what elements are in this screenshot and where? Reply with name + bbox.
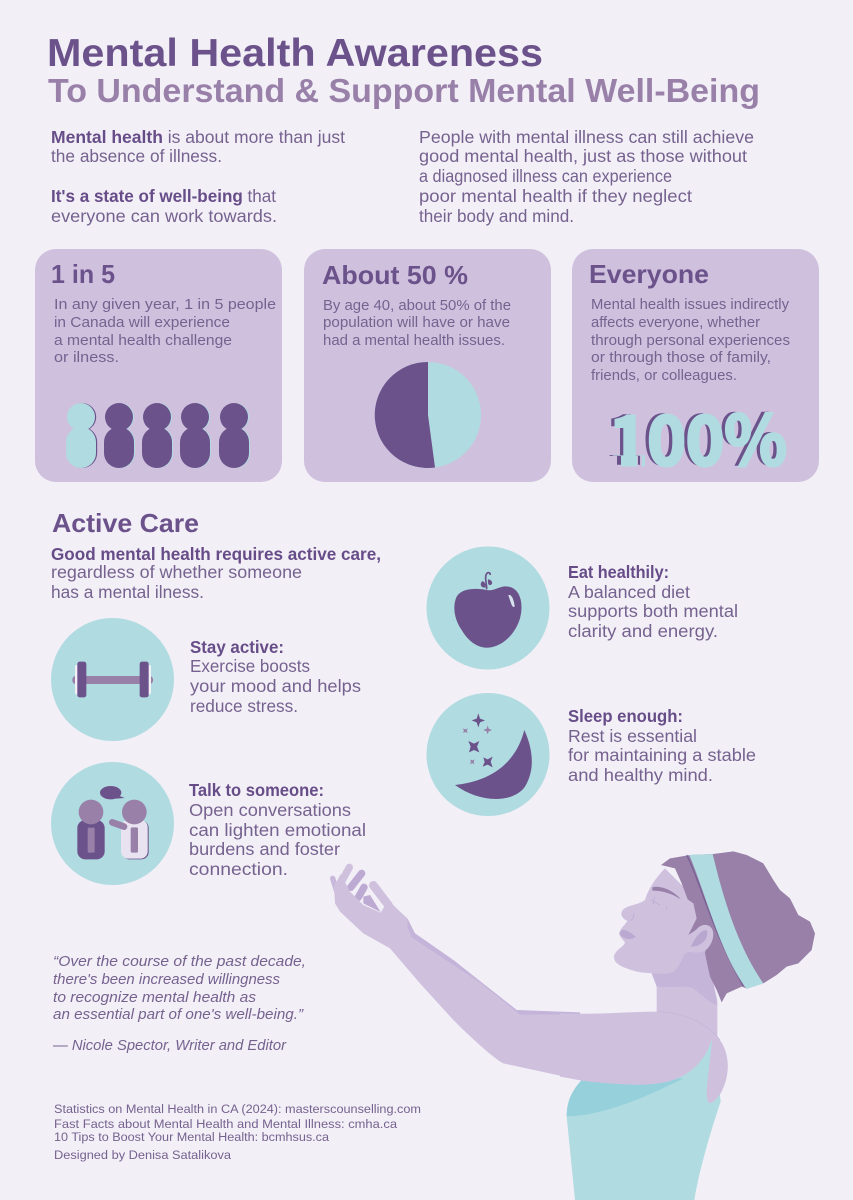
heading: active care: Active Care bbox=[52, 508, 199, 538]
text block: talk to someone: can lighten emotional bbox=[189, 820, 366, 840]
quote: “Over the course of the past decade, bbox=[53, 954, 306, 970]
text block: intro right: a diagnosed illness can experience bbox=[419, 166, 672, 186]
icon: five people, one highlighted bbox=[66, 403, 250, 468]
sources bbox=[54, 1102, 421, 1162]
text block: intro right: good mental health, just as those without bbox=[419, 146, 747, 166]
text block: talk to someone: burdens and foster bbox=[189, 839, 340, 859]
text block: stay active: Stay active: bbox=[190, 637, 284, 657]
text block: talk to someone bbox=[189, 780, 366, 879]
text: 1 in 5 description: a mental health challenge bbox=[54, 333, 232, 349]
text block: intro left: everyone can work towards. bbox=[51, 206, 277, 226]
shoulder bbox=[560, 1012, 728, 1103]
quote: an essential part of one's well-being.” bbox=[53, 1007, 304, 1023]
icon: two people talking bbox=[51, 762, 174, 885]
title: To Understand & Support Mental Well-Being bbox=[48, 73, 760, 110]
panel: 1 in 5 bbox=[35, 249, 282, 482]
icon: apple bbox=[426, 546, 550, 670]
text: everyone description: through personal experiences bbox=[591, 333, 790, 349]
text block: talk to someone: Talk to someone: bbox=[189, 780, 324, 800]
quote: there's been increased willingness bbox=[53, 972, 280, 988]
text block: intro right: poor mental health if they neglect bbox=[419, 186, 692, 206]
illustration: woman reaching upward bbox=[333, 851, 815, 1200]
text block: active care intro bbox=[51, 544, 381, 602]
heading: about 50 %: About 50 % bbox=[322, 260, 468, 290]
text block: talk to someone: Open conversations bbox=[189, 800, 351, 820]
text block: intro right: People with mental illness can still achieve bbox=[419, 127, 754, 147]
text block: intro left: It's a state of well-being that bbox=[51, 186, 276, 206]
text block: stay active: Exercise boosts bbox=[190, 656, 310, 676]
text block: stay active: reduce stress. bbox=[190, 696, 298, 716]
ear bbox=[686, 925, 713, 953]
quote: — Nicole Spector, Writer and Editor bbox=[52, 1038, 287, 1054]
text block: stay active: your mood and helps bbox=[190, 676, 361, 696]
text block: sleep enough bbox=[568, 706, 756, 785]
chart: pie 50 percent bbox=[375, 362, 481, 468]
face bbox=[614, 868, 707, 974]
quote: to recognize mental health as bbox=[53, 990, 256, 1006]
text: 1 in 5 description: In any given year, 1 in 5 people bbox=[54, 297, 276, 313]
title bbox=[47, 32, 760, 110]
statistic: 100%: 100% bbox=[605, 385, 783, 484]
sources: Fast Facts about Mental Health and Mental Illness: cmha.ca bbox=[54, 1117, 397, 1131]
sources: Statistics on Mental Health in CA (2024): masterscounselling.com bbox=[54, 1102, 421, 1116]
text block: eat healthily: supports both mental bbox=[568, 601, 738, 621]
text block: intro right bbox=[419, 127, 754, 226]
sources: 10 Tips to Boost Your Mental Health: bcmhsus.ca bbox=[54, 1130, 329, 1144]
text: everyone description: friends, or colleagues. bbox=[591, 368, 737, 384]
text: about 50 % description: population will have or have bbox=[323, 315, 510, 331]
text block: eat healthily: A balanced diet bbox=[568, 582, 690, 602]
text block: sleep enough: for maintaining a stable bbox=[568, 745, 756, 765]
text block: sleep enough: Rest is essential bbox=[568, 726, 697, 746]
text: everyone description: or through those of family, bbox=[591, 350, 771, 366]
statistic: 100% bbox=[610, 412, 786, 468]
panel: about 50 percent bbox=[304, 249, 551, 482]
hair bbox=[661, 851, 815, 1002]
text: about 50 % description: had a mental health issues. bbox=[323, 333, 505, 349]
text: 1 in 5 description bbox=[54, 297, 276, 366]
icon: dumbbell bbox=[51, 618, 174, 741]
text: everyone description bbox=[591, 297, 790, 384]
text block: sleep enough: Sleep enough: bbox=[568, 706, 683, 726]
text: about 50 % description: By age 40, about 50% of the bbox=[323, 298, 511, 314]
text block: intro right: their body and mind. bbox=[419, 206, 574, 226]
text: 1 in 5 description: or ilness. bbox=[54, 350, 119, 366]
text: everyone description: affects everyone, whether bbox=[591, 315, 760, 331]
title: Mental Health Awareness bbox=[47, 32, 543, 75]
arm and hand bbox=[333, 867, 580, 1080]
heading: 1 in 5: 1 in 5 bbox=[51, 259, 115, 289]
text: everyone description: Mental health issues indirectly bbox=[591, 297, 790, 313]
sources: Designed by Denisa Satalikova bbox=[54, 1148, 231, 1162]
text: about 50 % description bbox=[323, 298, 511, 349]
icon: moon and stars bbox=[426, 693, 550, 816]
text block: sleep enough: and healthy mind. bbox=[568, 765, 713, 785]
statistic: 100%: 100% bbox=[609, 386, 787, 485]
text block: stay active bbox=[190, 637, 361, 716]
heading: everyone: Everyone bbox=[589, 259, 709, 289]
text block: eat healthily bbox=[568, 562, 738, 641]
text block: intro left: the absence of illness. bbox=[51, 146, 222, 166]
headband bbox=[687, 854, 763, 989]
text block: intro left bbox=[51, 127, 345, 226]
text block: eat healthily: clarity and energy. bbox=[568, 621, 718, 641]
neck bbox=[632, 933, 717, 1043]
text block: active care intro: Good mental health requires active care, bbox=[51, 544, 381, 564]
text: 1 in 5 description: in Canada will experience bbox=[54, 315, 230, 331]
panel: everyone bbox=[572, 249, 819, 485]
text block: active care intro: regardless of whether someone bbox=[51, 562, 302, 582]
text block: talk to someone: connection. bbox=[189, 859, 288, 879]
top: teal tank top bbox=[567, 1035, 721, 1200]
text block: eat healthily: Eat healthily: bbox=[568, 562, 669, 582]
quote bbox=[52, 954, 306, 1054]
text block: active care intro: has a mental ilness. bbox=[51, 582, 204, 602]
text block: intro left: Mental health is about more than just bbox=[51, 127, 345, 147]
